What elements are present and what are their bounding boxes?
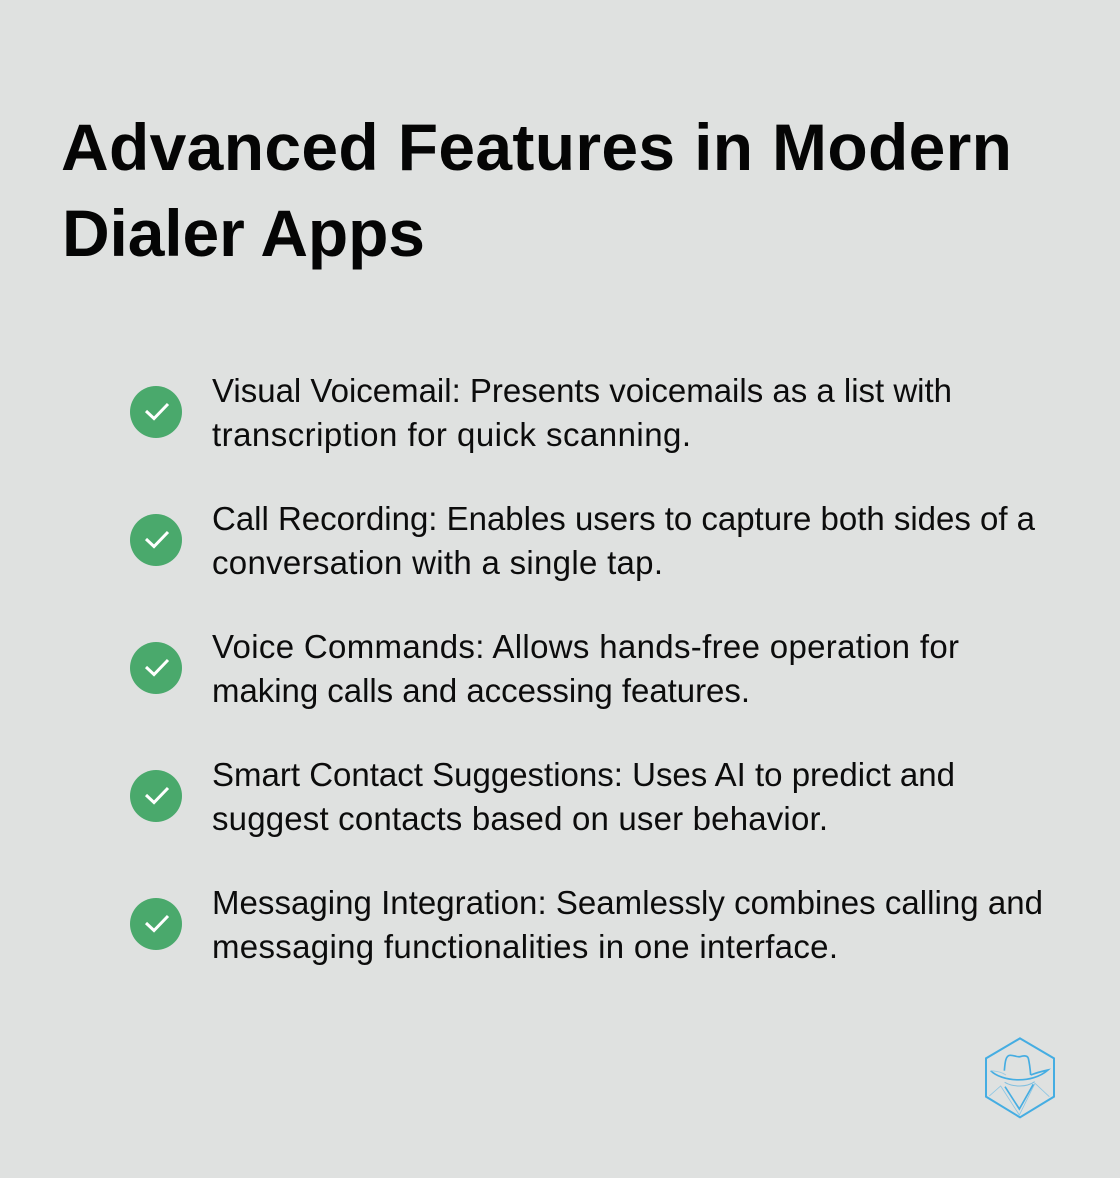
item: call recording <box>130 500 1036 581</box>
feature list <box>130 372 1043 965</box>
text: call recording: Call Recording: Enables users to capture both sides of a <box>212 500 1036 537</box>
icon: check badge <box>130 642 182 694</box>
text: visual voicemail: Visual Voicemail: Presents voicemails as a list with <box>212 372 952 409</box>
icon: check badge <box>130 770 182 822</box>
item: messaging integration <box>130 884 1043 965</box>
text: voice commands: Voice Commands: Allows hands-free operation for <box>212 628 959 665</box>
item: smart contact suggestions <box>130 756 955 837</box>
icon: check badge <box>130 386 182 438</box>
icon: check badge <box>130 514 182 566</box>
text: voice commands <box>212 628 959 709</box>
text: smart contact suggestions: Smart Contact Suggestions: Uses AI to predict and <box>212 756 955 793</box>
text: messaging integration: messaging functionalities in one interface. <box>212 928 838 965</box>
icon: spy logo <box>986 1038 1054 1117</box>
item: visual voicemail <box>130 372 952 453</box>
icon: check badge <box>130 898 182 950</box>
title <box>61 110 1012 270</box>
text: smart contact suggestions <box>212 756 955 837</box>
text: smart contact suggestions: suggest contacts based on user behavior. <box>212 800 828 837</box>
text: visual voicemail: transcription for quick scanning. <box>212 416 691 453</box>
title: Advanced Features in Modern <box>61 110 1012 184</box>
text: visual voicemail <box>212 372 952 453</box>
text: call recording <box>212 500 1036 581</box>
text: call recording: conversation with a single tap. <box>212 544 663 581</box>
title: Dialer Apps <box>62 196 425 270</box>
text: messaging integration <box>212 884 1043 965</box>
item: voice commands <box>130 628 959 709</box>
text: messaging integration: Messaging Integration: Seamlessly combines calling and <box>212 884 1043 921</box>
text: voice commands: making calls and accessing features. <box>212 672 750 709</box>
